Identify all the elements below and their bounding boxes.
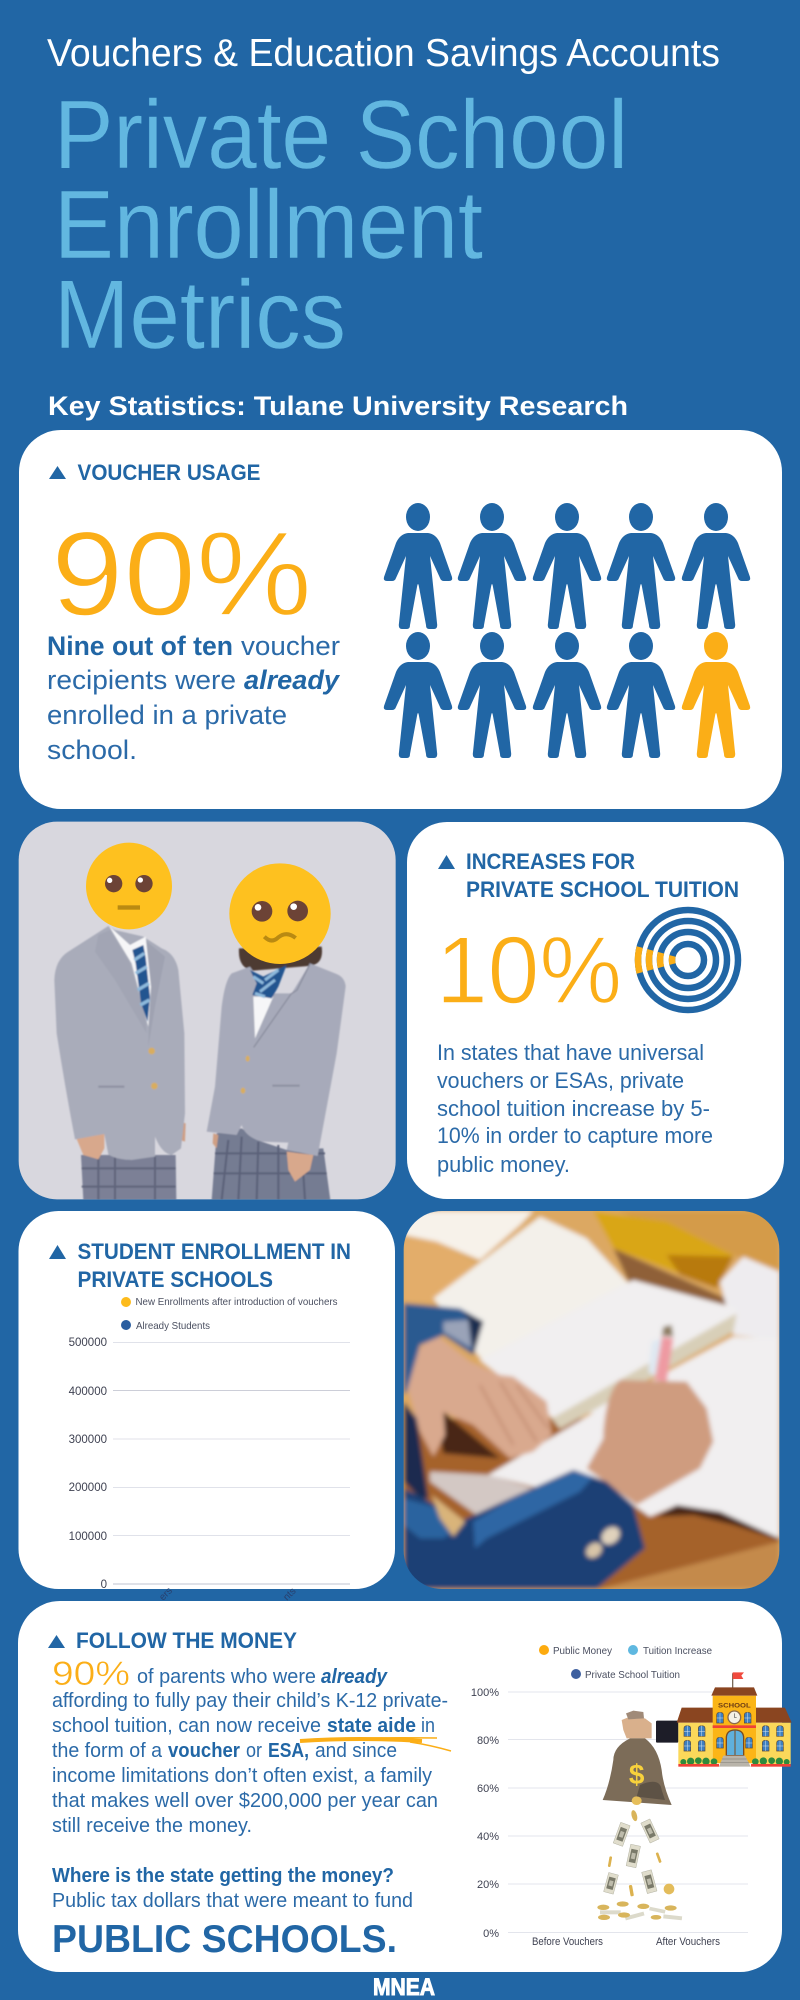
pen [655, 1337, 673, 1382]
chart grid and axes: 20% [477, 1879, 499, 1891]
chart grid and axis [69, 1337, 350, 1591]
chart legend: New Enrollments after introduction of vouchers [136, 1296, 338, 1308]
front notebook [488, 1337, 779, 1538]
heading: student enrollment: STUDENT ENROLLMENT IN [78, 1239, 351, 1264]
text: nine out of ten [47, 631, 341, 765]
chart grid and axes: Before Vouchers [532, 1936, 603, 1948]
chart grid and axes: 0% [483, 1928, 499, 1940]
text: tuition explanation: school tuition increase by 5- [437, 1096, 710, 1121]
section heading: Key Statistics: Tulane University Research [48, 391, 628, 421]
text: 90% of parents: already [321, 1665, 388, 1688]
text: 90% of parents: still receive the money. [52, 1814, 252, 1837]
text: 90% of parents: ESA, [268, 1739, 309, 1762]
title: Metrics [54, 260, 346, 369]
text: 90% of parents: income limitations don’t often exist, a family [52, 1764, 433, 1787]
title [54, 80, 628, 369]
panel: tuition increases [407, 822, 784, 1199]
text: 90% of parents: school tuition, can now receive [52, 1714, 321, 1737]
heading: tuition increases: INCREASES FOR [466, 849, 635, 874]
text: where is the money: Where is the state getting the money? [52, 1864, 394, 1887]
clipped axis labels: ers [157, 1586, 175, 1603]
text: nine out of ten: already [244, 665, 341, 695]
pictogram: ten people, one highlighted [384, 503, 750, 758]
chart grid and axis: 0 [101, 1579, 107, 1591]
text: tuition explanation: public money. [437, 1152, 570, 1177]
panel: photo of student writing [404, 1211, 780, 1589]
chart legend: Already Students [136, 1320, 210, 1332]
panel: photo of two students with emoji faces [15, 820, 400, 1205]
text: 90% of parents: or [246, 1739, 262, 1762]
right hand [587, 1380, 713, 1505]
chart legend: Private School Tuition [585, 1669, 680, 1681]
chart grid and axes: 100% [471, 1687, 499, 1699]
chart grid and axes: 80% [477, 1735, 499, 1747]
text: 90% of parents: 90% [52, 1655, 130, 1693]
heading: voucher usage: VOUCHER USAGE [78, 460, 260, 485]
text: 90% of parents: and since [315, 1739, 397, 1762]
text: tuition explanation: vouchers or ESAs, private [437, 1068, 684, 1093]
text: tuition explanation: 10% in order to capture more [437, 1123, 713, 1148]
text: tuition explanation [437, 1040, 713, 1177]
text: where is the money: Public tax dollars that were meant to fund [52, 1889, 413, 1912]
emoji face: neutral [86, 843, 172, 929]
panel: student enrollment chart [18, 1211, 395, 1591]
clipped axis labels: nts [281, 1586, 299, 1603]
chart grid and axis: 500000 [69, 1337, 107, 1349]
boy [54, 926, 186, 1200]
chart grid and axis: 300000 [69, 1434, 107, 1446]
chart legend: Public Money [553, 1645, 613, 1657]
text: nine out of ten: Nine out of ten [47, 631, 233, 661]
stat: 10%: 10% [436, 917, 622, 1024]
middle book [480, 1280, 737, 1418]
text: where is the money [52, 1864, 413, 1912]
heading: tuition increases [438, 849, 739, 902]
text: 90% of parents: affording to fully pay their child’s K-12 private- [52, 1689, 448, 1712]
text: 90% of parents: voucher [168, 1739, 240, 1762]
stat: 90%: 90% [51, 507, 312, 641]
buttons [598, 1523, 623, 1548]
illustration: school building: SCHOOL [718, 1702, 751, 1709]
heading: follow the money: FOLLOW THE MONEY [76, 1628, 297, 1653]
chart grid and axis: 100000 [69, 1531, 107, 1543]
text: 90% of parents: of parents who were [137, 1665, 316, 1688]
text: 90% of parents: state aide [327, 1714, 416, 1737]
girl [207, 947, 346, 1200]
panel: voucher usage [19, 430, 782, 809]
left sleeve [404, 1303, 483, 1395]
text: nine out of ten: voucher [241, 631, 340, 661]
chart grid and axes: 60% [477, 1783, 499, 1795]
text: 90% of parents: in [421, 1714, 435, 1737]
chart legend [539, 1645, 712, 1681]
illustration: money bag and falling cash [597, 1711, 682, 1920]
text: nine out of ten: school. [47, 735, 137, 765]
title: Enrollment [54, 170, 483, 279]
chart grid and axes [471, 1687, 748, 1948]
front sleeve [404, 1470, 645, 1589]
emoji face: worried [229, 863, 331, 964]
chart legend: Tuition Increase [643, 1645, 712, 1657]
callout: public schools: PUBLIC SCHOOLS. [52, 1918, 397, 1961]
chart grid and axes: After Vouchers [656, 1936, 720, 1948]
chart grid and axis: 200000 [69, 1482, 107, 1494]
text: tuition explanation: In states that have universal [437, 1040, 704, 1065]
text: nine out of ten: enrolled in a private [47, 700, 287, 730]
chart grid and axes: 40% [477, 1831, 499, 1843]
text: 90% of parents [52, 1655, 448, 1837]
heading: student enrollment [49, 1239, 351, 1292]
icon: target with orange wedge [638, 910, 738, 1010]
illustration: school building [677, 1672, 792, 1767]
subtitle: Vouchers & Education Savings Accounts [47, 32, 720, 75]
text: 90% of parents: that makes well over $200,000 per year can [52, 1789, 438, 1812]
illustration: money bag and falling cash: $ [629, 1759, 645, 1790]
text: nine out of ten: recipients were [47, 665, 236, 695]
clipped axis labels [157, 1586, 299, 1603]
title: Private School [54, 80, 628, 189]
desk [404, 1418, 779, 1589]
underline scribble [300, 1738, 451, 1751]
chart legend [121, 1296, 338, 1332]
heading: student enrollment: PRIVATE SCHOOLS [78, 1267, 273, 1292]
left hand [407, 1335, 552, 1458]
text: 90% of parents: the form of a [52, 1739, 163, 1762]
heading: tuition increases: PRIVATE SCHOOL TUITION [466, 877, 739, 902]
panel: follow the money [18, 1601, 782, 1972]
chart grid and axis: 400000 [69, 1386, 107, 1398]
